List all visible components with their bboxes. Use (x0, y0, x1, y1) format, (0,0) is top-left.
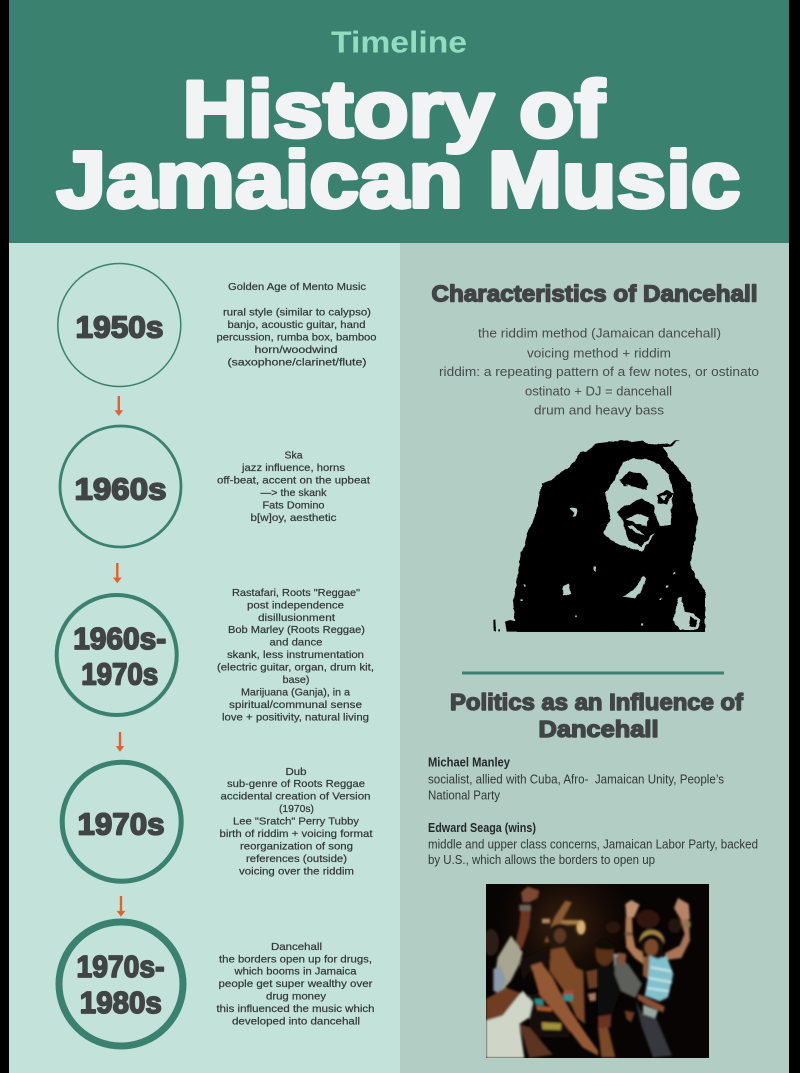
text: Dancehall: developed into dancehall (232, 1016, 360, 1028)
text: Dancehall: this influenced the music which (216, 1003, 375, 1015)
text: Michael Manley and Edward Seaga: Michael Manley (428, 755, 511, 770)
text: 1950s Mento: Golden Age of Mento Music (228, 281, 366, 293)
text: Roots Reggae: Marijuana (Ganja), in a (241, 686, 350, 698)
timeline circles and years (57, 264, 183, 1046)
circle: 1970s-1980s (59, 922, 183, 1046)
text: 1960s Ska: off-beat, accent on the upbeat (217, 475, 370, 487)
icon: Bob Marley silhouette (493, 440, 710, 639)
text: Michael Manley and Edward Seaga: middle and upper class concerns, Jamaican Labor Party, backed (428, 837, 758, 852)
text: Roots Reggae: skank, less instrumentation (227, 649, 364, 661)
text: characteristics list: voicing method + riddim (527, 346, 671, 360)
arrow: 1950s to 1960s (114, 396, 123, 416)
panel: right column (400, 243, 789, 1073)
arrow: 1960s-1970s to 1970s (116, 732, 124, 752)
text: Dancehall: Dancehall (271, 941, 322, 953)
text: characteristics list: the riddim method (Jamaican dancehall) (478, 326, 721, 340)
circle: 1970s: 1970s (78, 806, 164, 842)
circle: 1960s-1970s: 1970s (81, 656, 158, 692)
eyebrow: Timeline: Timeline (331, 24, 467, 60)
text: Dub: Dub (286, 766, 307, 778)
text: Michael Manley and Edward Seaga (428, 755, 758, 867)
circle: 1970s-1980s: 1970s- (76, 949, 164, 984)
text: 1950s Mento: rural style (similar to calypso) (223, 306, 371, 318)
text: Michael Manley and Edward Seaga: National Party (428, 787, 500, 802)
text: 1950s Mento: banjo, acoustic guitar, hand (228, 319, 366, 331)
circle: 1970s (62, 762, 181, 881)
text: Roots Reggae: base) (282, 674, 310, 686)
photo left half: crowd (483, 887, 598, 1058)
photo: dancers in a club (483, 884, 709, 1058)
text: 1950s Mento: percussion, rumba box, bamboo (216, 332, 377, 344)
text: Roots Reggae (217, 587, 374, 723)
text: Dancehall (216, 941, 375, 1028)
title: Jamaican Music (56, 135, 740, 224)
heading: Politics as an Influence of Dancehall: Politics as an Influence of (450, 689, 743, 715)
text: characteristics list (439, 326, 759, 418)
circle: 1950s: 1950s (76, 310, 164, 344)
circle: 1960s-1970s: 1960s- (73, 621, 166, 656)
circle: 1960s-1970s (57, 595, 177, 715)
arrow: 1960s to 1960s-1970s (113, 563, 122, 583)
panel: timeline column (9, 243, 400, 1073)
title (56, 64, 740, 224)
text: Michael Manley and Edward Seaga: socialist, allied with Cuba, Afro- Jamaican Unity, People’s (428, 771, 724, 786)
text: Roots Reggae: (electric guitar, organ, drum kit, (217, 661, 374, 673)
text: 1950s Mento: (saxophone/clarinet/flute) (228, 357, 366, 369)
text: Dancehall: which booms in Jamaica (233, 966, 357, 978)
text: Roots Reggae: love + positivity, natural living (222, 711, 369, 723)
text: Dub: references (outside) (246, 853, 347, 865)
circle: 1960s: 1960s (74, 472, 166, 506)
arrow: 1970s to 1970s-1980s (117, 896, 125, 917)
text: characteristics list: ostinato + DJ = dancehall (525, 384, 672, 398)
photo right half: woman dancing (595, 898, 691, 1057)
text: 1960s Ska: Fats Domino (262, 500, 325, 512)
text: Dancehall: people get super wealthy over (218, 978, 373, 990)
text: Roots Reggae: spiritual/communal sense (229, 699, 362, 711)
text: Dub: birth of riddim + voicing format (220, 828, 373, 840)
text: Dub: reorganization of song (240, 841, 353, 853)
heading: Politics as an Influence of Dancehall (450, 689, 743, 742)
heading: Characteristics of Dancehall: Characteristics of Dancehall (432, 280, 758, 306)
text: characteristics list: riddim: a repeating pattern of a few notes, or ostinato (439, 364, 759, 379)
text: Roots Reggae: and dance (270, 636, 323, 648)
text: Dub: sub-genre of Roots Reggae (227, 778, 365, 790)
text: Dancehall: the borders open up for drugs, (219, 954, 372, 966)
text: Michael Manley and Edward Seaga: by U.S., which allows the borders to open up (428, 852, 655, 867)
circle: 1970s-1980s: 1980s (80, 985, 162, 1020)
panel: header (9, 0, 789, 243)
text: 1950s Mento (216, 281, 377, 369)
text: Roots Reggae: Bob Marley (Roots Reggae) (228, 624, 365, 636)
text: Michael Manley and Edward Seaga: Edward Seaga (wins) (428, 820, 536, 835)
text: 1960s Ska: —> the skank (260, 487, 327, 499)
text: characteristics list: drum and heavy bass (534, 402, 665, 418)
text: Roots Reggae: post independence (247, 599, 344, 611)
circle: 1960s (60, 426, 181, 547)
divider (462, 672, 724, 674)
heading: Politics as an Influence of Dancehall: Dancehall (538, 716, 658, 742)
text: Dub: accidental creation of Version (220, 791, 371, 803)
text: Dancehall: drug money (266, 991, 327, 1003)
text: Roots Reggae: Rastafari, Roots "Reggae" (232, 587, 360, 599)
text: 1960s Ska (217, 450, 370, 524)
text: Dub: (1970s) (279, 803, 314, 815)
title: History of (182, 64, 605, 154)
text: Dub (220, 766, 373, 878)
text: 1960s Ska: jazz influence, horns (241, 462, 345, 474)
text: Dub: Lee "Sratch" Perry Tubby (233, 816, 360, 828)
text: 1960s Ska: Ska (284, 450, 303, 462)
circle: 1950s (58, 264, 181, 386)
text: 1950s Mento: horn/woodwind (254, 344, 338, 356)
text: Dub: voicing over the riddim (239, 866, 354, 878)
text: Roots Reggae: disillusionment (258, 612, 335, 624)
text: 1960s Ska: b[w]oy, aesthetic (250, 512, 336, 524)
